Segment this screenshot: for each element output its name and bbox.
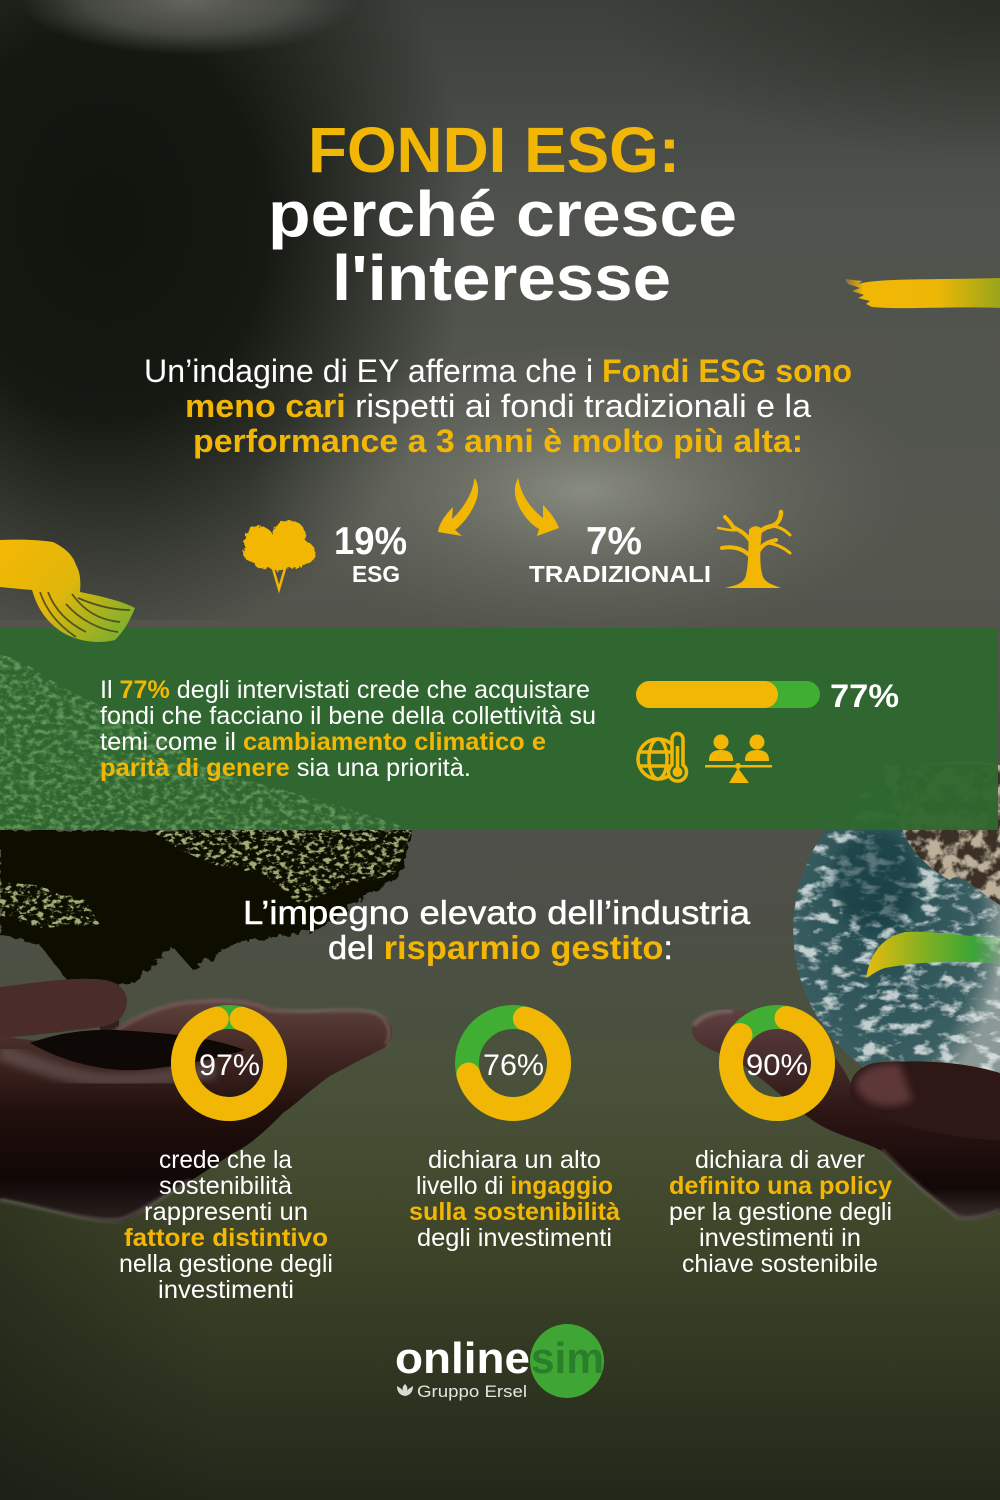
donut 90% bbox=[722, 1008, 832, 1118]
icon: gender balance bbox=[705, 734, 772, 783]
column text 3 bbox=[669, 1146, 892, 1278]
logo: onlinesim: online bbox=[395, 1334, 530, 1383]
band text bbox=[100, 676, 596, 782]
title: l'interesse bbox=[332, 242, 671, 314]
icon: healthy tree bbox=[243, 520, 315, 589]
intro text bbox=[144, 353, 852, 459]
column text 2: livello di ingaggio bbox=[416, 1172, 613, 1200]
19% ESG stat: ESG bbox=[352, 561, 400, 587]
column text 1: nella gestione degli bbox=[119, 1250, 333, 1278]
section heading: del risparmio gestito : bbox=[328, 929, 673, 966]
column text 2: dichiara un alto bbox=[428, 1146, 601, 1174]
column text 3: investimenti in bbox=[699, 1224, 861, 1252]
logo: onlinesim: Gruppo Ersel bbox=[417, 1382, 527, 1401]
column text 2 bbox=[409, 1146, 620, 1252]
title: perché cresce bbox=[268, 178, 737, 250]
illustration: tree bbox=[0, 830, 412, 1032]
intro text: meno cari rispetti ai fondi tradizionali e la bbox=[185, 388, 811, 424]
column text 1: fattore distintivo bbox=[124, 1224, 328, 1252]
progress bar 77% bbox=[636, 678, 899, 714]
donut 76%: 76% bbox=[483, 1049, 544, 1082]
column text 3: definito una policy bbox=[669, 1172, 892, 1200]
progress bar 77%: 77% bbox=[830, 678, 899, 714]
arrow: to traditional bbox=[515, 478, 559, 536]
decorative brush: top right bbox=[845, 278, 1000, 308]
arrow: to ESG bbox=[438, 478, 478, 536]
7% traditional stat bbox=[529, 520, 711, 587]
illustration: right hand bbox=[692, 1010, 1000, 1220]
icon: dead tree bbox=[718, 512, 790, 588]
column text 2: sulla sostenibilità bbox=[409, 1198, 620, 1226]
logo: onlinesim bbox=[395, 1324, 604, 1401]
title: FONDI ESG: bbox=[308, 114, 680, 186]
7% traditional stat: TRADIZIONALI bbox=[529, 561, 711, 587]
decorative brush: over globe bbox=[866, 932, 1000, 978]
donut 90%: 90% bbox=[746, 1049, 808, 1082]
donut 76% bbox=[457, 1007, 569, 1119]
illustration: left hand with soil bbox=[0, 979, 392, 1222]
section heading: L’impegno elevato dell’industria bbox=[243, 894, 751, 931]
column text 1: rappresenti un bbox=[144, 1198, 308, 1226]
19% ESG stat: 19% bbox=[334, 520, 407, 563]
intro text: performance a 3 anni è molto più alta: bbox=[193, 423, 803, 459]
19% ESG stat bbox=[334, 520, 407, 587]
column text 3: per la gestione degli bbox=[669, 1198, 892, 1226]
column text 1: sostenibilità bbox=[159, 1172, 292, 1200]
green band bbox=[0, 628, 998, 830]
decorative brush: left bbox=[0, 540, 135, 642]
icon: globe with thermometer bbox=[638, 734, 686, 781]
donut 97% bbox=[172, 1006, 286, 1120]
section heading bbox=[243, 894, 751, 966]
column text 3: dichiara di aver bbox=[695, 1146, 865, 1174]
title bbox=[268, 114, 737, 314]
band text: temi come il cambiamento climatico e bbox=[100, 728, 546, 756]
7% traditional stat: 7% bbox=[586, 520, 642, 563]
column text 2: degli investimenti bbox=[417, 1224, 612, 1252]
column text 1 bbox=[119, 1146, 333, 1304]
logo: onlinesim: sim bbox=[531, 1334, 604, 1383]
band text: parità di genere sia una priorità. bbox=[100, 754, 471, 782]
column text 3: chiave sostenibile bbox=[682, 1250, 878, 1278]
band text: Il 77% degli intervistati crede che acquistare bbox=[100, 676, 590, 704]
illustration: globe bbox=[793, 761, 1000, 1099]
tree foliage texture on band bbox=[0, 655, 412, 830]
column text 1: investimenti bbox=[158, 1276, 294, 1304]
band text: fondi che facciano il bene della collettività su bbox=[100, 702, 596, 730]
column text 1: crede che la bbox=[159, 1146, 292, 1174]
donut 97%: 97% bbox=[199, 1049, 260, 1082]
intro text: Un’indagine di EY afferma che i Fondi ESG sono bbox=[144, 353, 852, 389]
